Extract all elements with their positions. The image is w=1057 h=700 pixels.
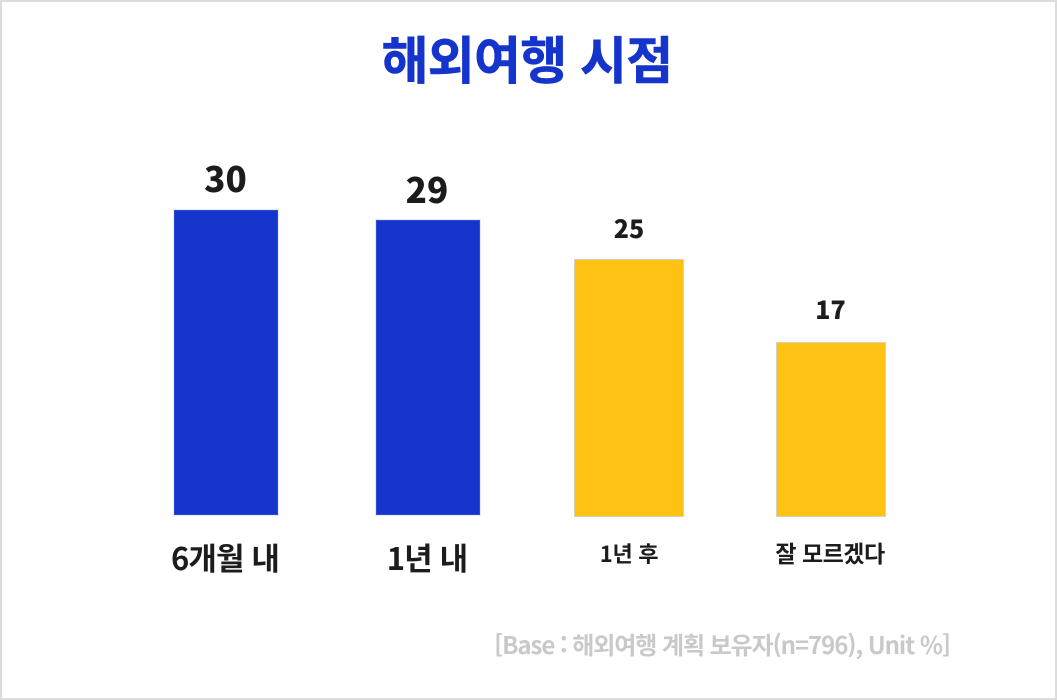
bar chart: [171, 152, 886, 579]
base note: [Base : 해외여행 계획 보유자(n=796), Unit %]: [494, 626, 950, 661]
title: 해외여행 시점: [382, 20, 672, 94]
label: 6개월 내: 6개월 내: [171, 534, 279, 579]
bar: 6개월 내: [174, 210, 278, 515]
label: 1년 후: 1년 후: [600, 537, 658, 569]
label: 1년 내: 1년 내: [387, 534, 467, 579]
bar: 1년 내: [376, 220, 480, 515]
bar: 1년 후: [574, 259, 684, 517]
label: 잘 모르겠다: 잘 모르겠다: [775, 535, 885, 569]
value: 29: 29: [406, 163, 448, 214]
bar: 잘 모르겠다: [776, 342, 886, 517]
value: 30: 30: [204, 152, 247, 203]
value: 25: 25: [614, 210, 644, 246]
value: 17: 17: [815, 291, 846, 327]
